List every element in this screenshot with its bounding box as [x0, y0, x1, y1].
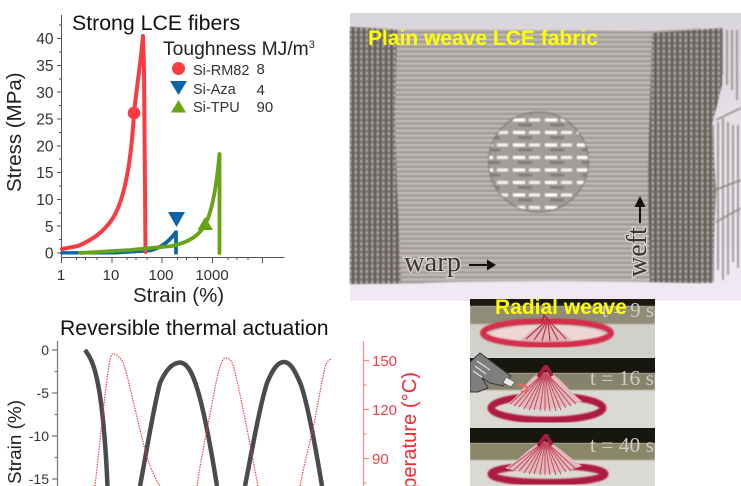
warp label and arrow	[404, 247, 496, 278]
frame: t = 16 s: t = 16 s	[590, 366, 654, 390]
frame: t = 40 s: t = 40 s	[590, 433, 654, 457]
marker: Si-Aza triangle	[168, 212, 185, 227]
chart title: Strong LCE fibers	[72, 11, 240, 35]
frame: t = 40 s	[470, 427, 655, 486]
marker: Si-RM82 circle	[128, 107, 140, 119]
y axis title: Stress (MPa)	[3, 72, 26, 192]
y axis tick labels: 30	[36, 85, 54, 102]
left axis tick labels	[29, 342, 49, 486]
y axis tick labels: 10	[36, 192, 54, 209]
y axis tick labels: 25	[36, 112, 54, 128]
y axis tick labels: 15	[36, 165, 54, 182]
legend row: Si-Aza: 4	[256, 82, 265, 99]
woven fabric body	[350, 27, 700, 284]
legend row: Si-RM82: Si-RM82	[193, 63, 249, 79]
left axis title: Strain (%)	[5, 400, 26, 484]
right dark selvedge band	[648, 28, 722, 283]
left axis tick labels: -5	[37, 385, 49, 401]
temperature curve	[95, 354, 332, 486]
y axis tick labels	[36, 31, 54, 262]
curve: Si-RM82	[62, 36, 146, 252]
x axis tick labels	[57, 267, 229, 284]
x axis tick labels: 1000	[195, 267, 229, 284]
right axis tick labels	[372, 353, 397, 468]
right fringe threads	[713, 30, 741, 282]
curve: Si-TPU	[80, 154, 220, 253]
y axis tick labels: 5	[45, 219, 54, 236]
curve: Si-Aza	[62, 232, 176, 253]
stress-strain chart: Strong LCE fibers	[3, 11, 315, 307]
legend	[163, 39, 315, 116]
y axis tick labels: 20	[36, 138, 54, 156]
right axis tick labels: 90	[372, 451, 389, 468]
x axis tick labels: 100	[148, 267, 174, 284]
marker: Si-TPU triangle	[198, 217, 213, 230]
legend row: Si-TPU	[171, 99, 273, 116]
legend row: Si-Aza	[170, 81, 265, 99]
right temperature axis	[364, 341, 369, 486]
photo panel: plain weave LCE fabric	[350, 13, 741, 301]
y axis tick labels: 40	[36, 31, 54, 48]
chart title: Reversible thermal actuation	[60, 317, 329, 340]
weft label and arrow	[622, 196, 653, 277]
icon: heat gun	[470, 353, 527, 392]
strain curve	[85, 350, 322, 486]
legend row: Si-TPU: 90	[256, 99, 273, 116]
legend row: Si-RM82: 8	[256, 61, 265, 78]
left axis tick labels: -10	[29, 428, 49, 444]
radial weave label: Radial weave	[495, 296, 627, 319]
right axis tick labels: 120	[372, 402, 397, 419]
photo panel: radial weave time sequence	[470, 296, 655, 486]
legend heading: Toughness MJ/m	[163, 39, 309, 60]
warp label and arrow: warp	[404, 247, 461, 278]
legend row: Si-RM82	[172, 61, 265, 79]
legend row: Si-TPU: Si-TPU	[193, 100, 240, 116]
weft label and arrow: weft	[622, 227, 653, 277]
right axis tick labels: 150	[372, 353, 397, 370]
legend heading: 3	[309, 39, 315, 51]
frame: t = 9 s	[470, 298, 655, 357]
left strain axis	[52, 341, 58, 486]
left dark selvedge band	[350, 27, 401, 284]
frame: t = 9 s: t = 9 s	[602, 298, 654, 322]
x axis tick labels: 1	[57, 267, 65, 284]
x axis title: Strain (%)	[133, 284, 224, 307]
photo background	[350, 13, 741, 301]
x axis tick labels: 10	[103, 267, 119, 284]
chart: reversible thermal actuation	[5, 317, 421, 486]
right axis title: perature (°C)	[399, 372, 421, 486]
x axis with ticks	[61, 258, 284, 263]
left axis tick labels: 0	[41, 342, 49, 358]
frame: t = 16 s	[470, 357, 655, 427]
y axis tick labels: 35	[36, 58, 54, 75]
y axis with ticks	[57, 15, 62, 258]
legend row: Si-Aza: Si-Aza	[193, 82, 237, 98]
magnified inset circle	[488, 112, 588, 212]
y axis tick labels: 0	[45, 246, 54, 262]
fabric label: Plain weave LCE fabric	[368, 27, 598, 50]
